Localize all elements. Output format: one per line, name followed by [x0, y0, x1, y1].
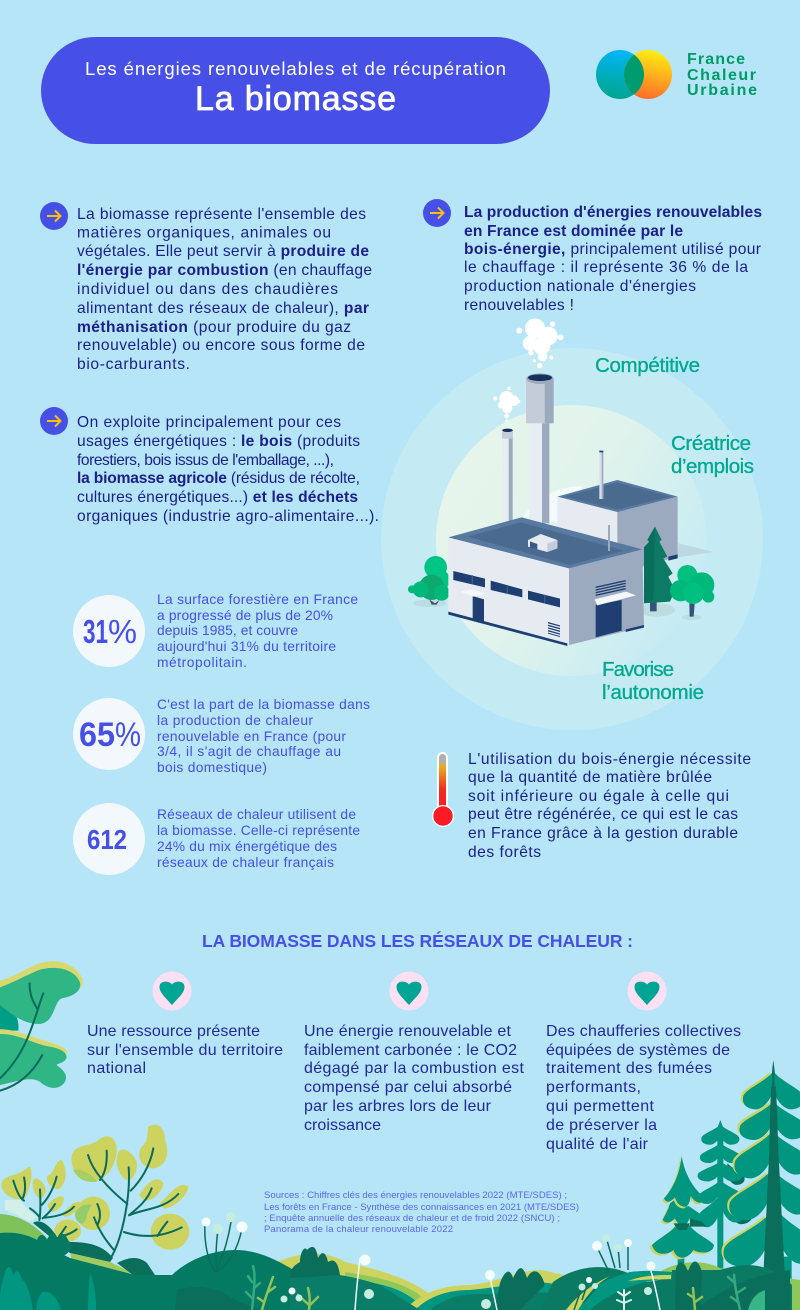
stat: 65%: 3/4, il s'agit de chauffage au	[157, 744, 341, 759]
title banner: La biomasse	[195, 80, 396, 118]
far right hills	[660, 1262, 800, 1310]
main building	[448, 517, 644, 646]
smoke clouds	[493, 318, 564, 422]
label: Favorise l'autonomie	[602, 658, 704, 704]
logo: France Chaleur Urbaine: France	[687, 51, 745, 68]
stat: 612: Réseaux de chaleur utilisent de	[157, 807, 356, 822]
column text: renewable energy	[304, 1023, 525, 1134]
stat: 612: 612	[87, 824, 127, 855]
title banner: Les énergies renouvelables et de récupération	[85, 58, 506, 79]
middle pine	[698, 1120, 753, 1310]
column text: collective boilers: traitement des fumées	[546, 1060, 712, 1077]
small chimney	[502, 429, 513, 521]
label: Compétitive: Compétitive	[595, 354, 700, 377]
text block: biomass definition: l'énergie par combustion (en chauffage	[77, 262, 372, 279]
column text: resource	[87, 1023, 283, 1077]
roof unit	[528, 534, 557, 552]
tall pine	[722, 1060, 800, 1310]
text block: wood energy share: La production d'énergies renouvelables	[464, 204, 762, 221]
text block: biomass definition: individuel ou dans des chaudières	[77, 281, 338, 298]
stat: 65%: C'est la part de la biomasse dans	[157, 697, 370, 712]
sources: Les forêts en France - Synthèse des connaissances en 2021 (MTE/SDES)	[264, 1202, 579, 1213]
stat: 612: 24% du mix énergétique des	[157, 839, 337, 854]
text block: energy uses: organiques (industrie agro-alimentaire...).	[77, 508, 379, 525]
column text: resource: national	[87, 1060, 146, 1077]
column text: collective boilers: performants,	[546, 1079, 641, 1096]
stat: 65%: %	[115, 716, 141, 754]
background circles behind factory	[381, 348, 763, 730]
small pine	[650, 1156, 714, 1310]
column text: collective boilers	[546, 1023, 741, 1153]
stat: 31%: aujourd'hui 31% du territoire	[157, 639, 336, 654]
column text: collective boilers: équipées de systèmes de	[546, 1042, 730, 1059]
sources: Sources : Chiffres clés des énergies renouvelables 2022 (MTE/SDES) ;	[264, 1190, 567, 1201]
garage door with canopy	[596, 600, 622, 637]
factory illustration	[408, 318, 714, 646]
text block: energy uses: forestiers, bois issus de l'emballage, ...),	[77, 452, 334, 469]
column text: collective boilers: de préserver la	[546, 1117, 657, 1134]
stat: 31%	[73, 592, 358, 670]
stat: 65%: bois domestique)	[157, 760, 267, 775]
text block: biomass definition: La biomasse représente l'ensemble des	[77, 206, 366, 223]
text block: biomass definition: bio-carburants.	[77, 356, 190, 373]
stat: 612	[73, 803, 360, 875]
stat: 612: la biomasse. Celle-ci représente	[157, 823, 360, 838]
icon: heart 3	[628, 972, 666, 1010]
column text: renewable energy: dégagé par la combustion est	[304, 1060, 525, 1077]
round tree right	[670, 565, 714, 620]
logo: France Chaleur Urbaine: Chaleur	[687, 67, 756, 84]
text block: wood energy share: le chauffage : il représente 36 % de la	[464, 259, 748, 276]
stat: 612: réseaux de chaleur français	[157, 855, 334, 870]
label: Créatrice d'emplois: Créatrice	[671, 432, 751, 455]
text block: sustainable forest management: peut être régénérée, ce qui est le cas	[468, 806, 738, 823]
text block: wood energy share: production nationale d'énergies	[464, 278, 696, 295]
column text: renewable energy: faiblement carbonée : le CO2	[304, 1042, 517, 1059]
text block: biomass definition: méthanisation (pour produire du gaz	[77, 319, 351, 336]
text block: sustainable forest management: en France grâce à la gestion durable	[468, 825, 738, 842]
text block: wood energy share: en France est dominée par le	[464, 223, 683, 240]
column text: resource: sur l'ensemble du territoire	[87, 1042, 283, 1059]
text block: sustainable forest management	[468, 751, 751, 861]
text block: wood energy share: bois-énergie, principalement utilisé pour	[464, 241, 761, 258]
text block: energy uses: usages énergétiques : le bois (produits	[77, 433, 360, 450]
column text: collective boilers: Des chaufferies collectives	[546, 1023, 741, 1040]
left ground	[0, 1214, 80, 1270]
green/yellow curve hill	[566, 1271, 672, 1310]
column text: renewable energy: croissance	[304, 1117, 381, 1134]
round bush left	[408, 556, 450, 607]
arrow icon: paragraph 1	[40, 202, 68, 230]
stat: 31%: La surface forestière en France	[157, 592, 358, 607]
sources: Panorama de la chaleur renouvelable 2022	[264, 1224, 453, 1235]
sources	[264, 1190, 579, 1235]
pine tree by factory	[638, 527, 675, 617]
door with canopy	[473, 596, 484, 622]
arrow icon: right paragraph	[423, 199, 451, 227]
column text: renewable energy: compensé par celui absorbé	[304, 1079, 512, 1096]
text block: energy uses	[77, 414, 379, 525]
label: Créatrice d'emplois	[671, 432, 754, 478]
stat: 31%: depuis 1985, et couvre	[157, 623, 298, 638]
stat: 31%: %	[108, 613, 137, 650]
text block: energy uses: On exploite principalement pour ces	[77, 414, 341, 431]
stat: 31%: a progressé de plus de 20%	[157, 608, 333, 623]
stat: 65%: 65	[79, 716, 115, 754]
sprigs	[246, 1266, 745, 1310]
section heading: LA BIOMASSE DANS LES RÉSEAUX DE CHALEUR :	[202, 930, 633, 951]
arrow icon: paragraph 2	[40, 407, 68, 435]
text block: sustainable forest management: soit inférieure ou égale à celle qui	[468, 788, 729, 805]
mound centre right	[540, 1267, 660, 1310]
yellow band hill	[277, 1254, 432, 1310]
glow behind chimney	[523, 487, 583, 523]
text block: biomass definition: matières organiques, animales ou	[77, 224, 331, 242]
text block: energy uses: cultures énergétiques...) et les déchets	[77, 489, 358, 506]
icon: heart 2	[390, 972, 428, 1010]
stat: 65%: la production de chaleur	[157, 713, 313, 728]
back building	[557, 451, 714, 573]
vent right	[596, 580, 626, 596]
text block: sustainable forest management: des forêts	[468, 844, 541, 861]
column text: renewable energy: par les arbres lors de leur	[304, 1098, 492, 1115]
text block: wood energy share	[464, 204, 762, 314]
label: Favorise l'autonomie: Favorise	[602, 658, 674, 681]
text block: biomass definition	[77, 206, 372, 373]
ground: hills and plants	[0, 1214, 800, 1310]
text block: wood energy share: renouvelables !	[464, 297, 574, 314]
text block: biomass definition: renouvelable) ou encore sous forme de	[77, 337, 365, 354]
icon: thermometer	[432, 752, 454, 827]
foliage: top-left branches	[0, 961, 83, 1091]
large chimney	[526, 373, 554, 523]
sources: ; Enquête annuelle des réseaux de chaleur et de froid 2022 (SNCU) ;	[264, 1213, 560, 1224]
windows	[453, 571, 560, 607]
title banner	[41, 37, 550, 144]
stat: 31%: métropolitain.	[157, 655, 247, 670]
text block: biomass definition: alimentant des réseaux de chaleur), par	[77, 300, 369, 317]
bushes: bottom-left yellow foliage	[2, 1125, 189, 1258]
logo: France Chaleur Urbaine: Urbaine	[687, 82, 757, 99]
dandelions	[202, 1212, 660, 1310]
label: Créatrice d'emplois: d’emplois	[671, 455, 754, 478]
stat: 65%: renouvelable en France (pour	[157, 729, 346, 744]
text block: sustainable forest management: L'utilisation du bois-énergie nécessite	[468, 751, 751, 768]
hill between	[290, 1273, 420, 1310]
text block: energy uses: la biomasse agricole (résidus de récolte,	[77, 470, 360, 487]
stat: 31%: 31	[83, 613, 108, 650]
logo: France Chaleur Urbaine	[596, 50, 757, 99]
label: Favorise l'autonomie: l’autonomie	[602, 681, 704, 704]
text block: biomass definition: végétales. Elle peut servir à produire de	[77, 243, 369, 260]
column text: resource: Une ressource présente	[87, 1023, 260, 1040]
vent left	[548, 622, 560, 637]
column text: renewable energy: Une énergie renouvelable et	[304, 1023, 512, 1040]
stat: 65%	[73, 697, 370, 775]
pine trees right	[650, 1060, 800, 1310]
text block: sustainable forest management: que la quantité de matière brûlée	[468, 769, 712, 786]
column text: collective boilers: qui permettent	[546, 1098, 655, 1115]
column text: collective boilers: qualité de l'air	[546, 1136, 649, 1153]
icon: heart 1	[152, 972, 192, 1010]
